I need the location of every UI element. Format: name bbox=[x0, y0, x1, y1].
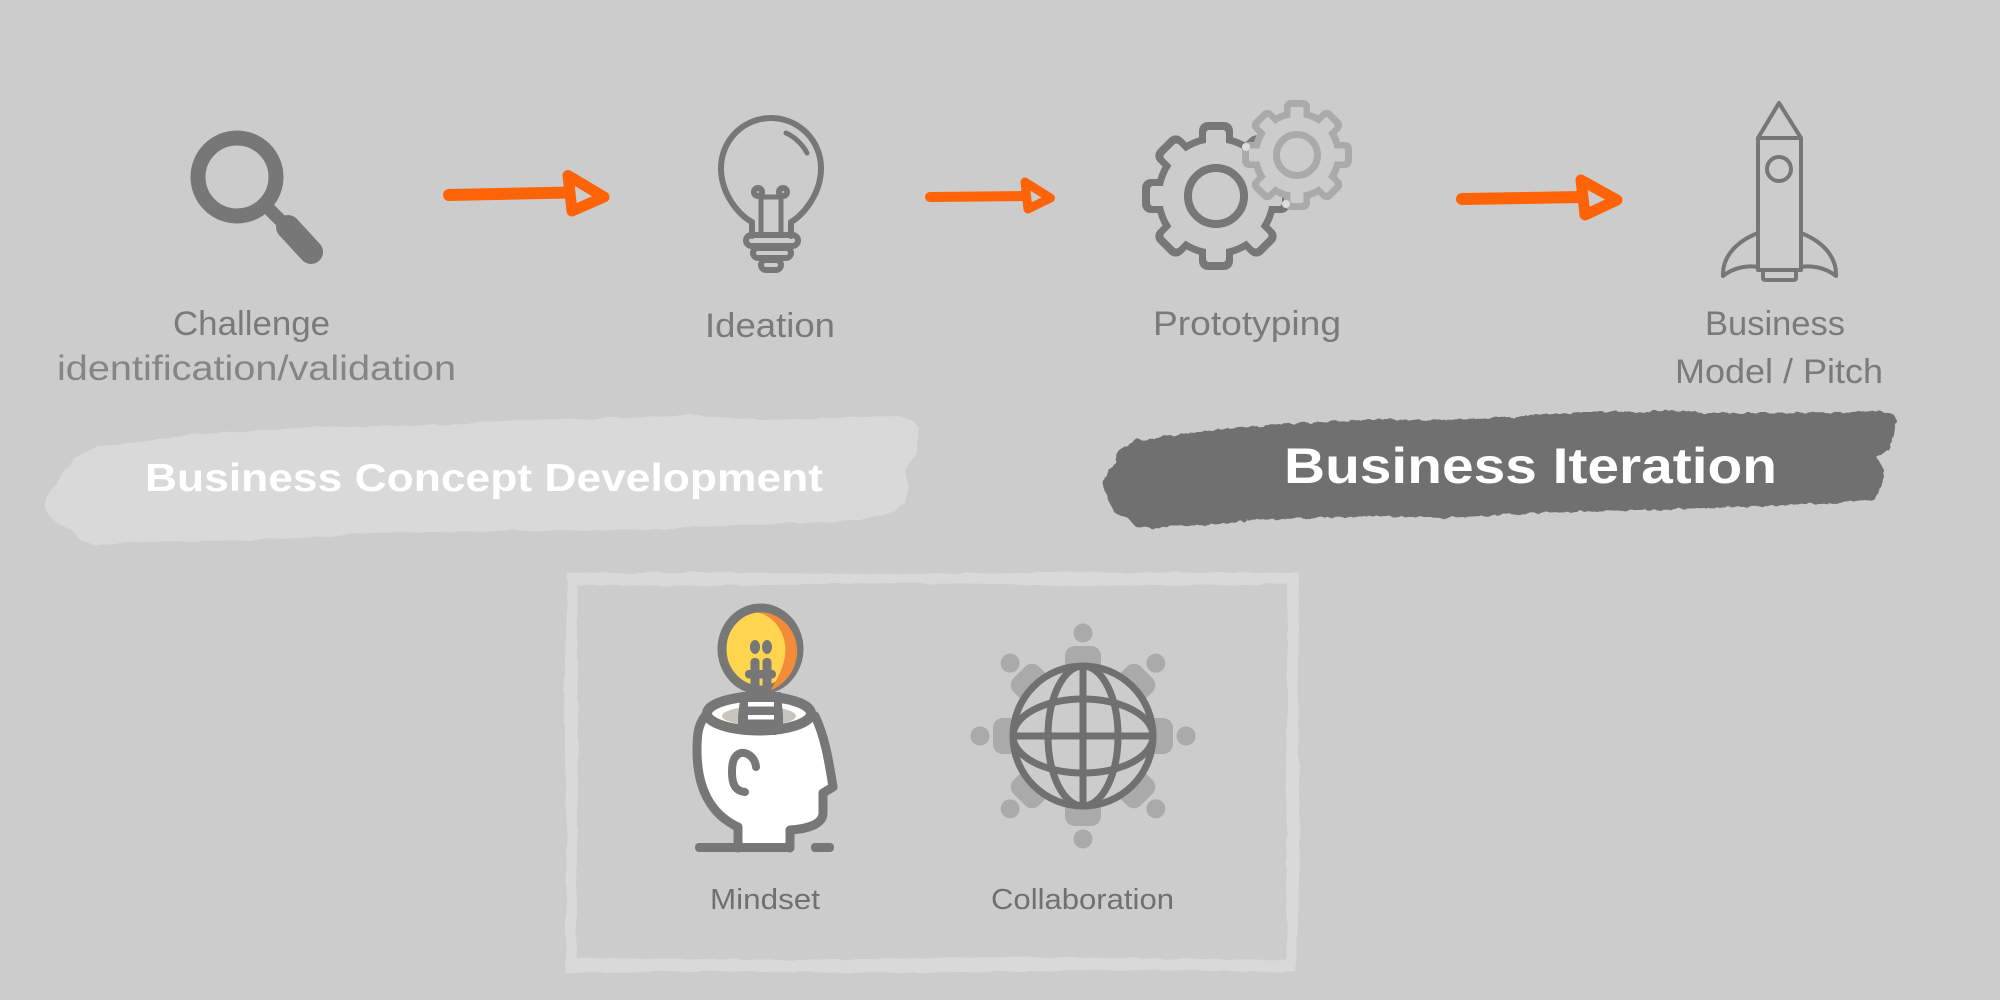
label: collaboration: Collaboration bbox=[991, 884, 1174, 916]
base line bbox=[695, 843, 792, 852]
head bbox=[697, 716, 833, 848]
people bbox=[970, 624, 1196, 848]
label: ideation: Ideation bbox=[705, 307, 835, 345]
icon: light bulb bbox=[721, 118, 821, 270]
arrow: challenge to ideation bbox=[449, 176, 604, 211]
label: business model pitch: Business bbox=[1705, 305, 1845, 343]
icon: small gear bbox=[1242, 100, 1352, 210]
label: challenge identification bbox=[57, 305, 456, 388]
arrow: prototyping to business model bbox=[1462, 180, 1617, 215]
icon: large gear bbox=[1142, 122, 1290, 270]
banner: business concept development bbox=[45, 415, 919, 545]
label: challenge identification: Challenge bbox=[173, 305, 330, 343]
ear bbox=[732, 753, 756, 792]
icon: magnifying glass bbox=[198, 138, 311, 252]
globe bbox=[1013, 666, 1153, 806]
icon: globe with people bbox=[970, 624, 1196, 848]
arrow: ideation to prototyping bbox=[930, 182, 1050, 209]
label: challenge identification: identification/validation bbox=[57, 349, 456, 388]
banner: business iteration bbox=[1103, 410, 1896, 528]
label: business model pitch bbox=[1675, 305, 1883, 391]
socket bbox=[738, 692, 783, 735]
label: business model pitch: Model / Pitch bbox=[1675, 353, 1883, 391]
banner: business concept development: Business Concept Development bbox=[145, 457, 823, 500]
icon: head with light bulb bbox=[695, 608, 834, 852]
icon: rocket bbox=[1723, 103, 1836, 280]
banner: business iteration: Business Iteration bbox=[1284, 438, 1777, 494]
bulb bbox=[722, 608, 799, 690]
small dash bbox=[811, 843, 834, 852]
label: mindset: Mindset bbox=[710, 884, 820, 916]
label: prototyping: Prototyping bbox=[1153, 305, 1341, 343]
rim bbox=[707, 696, 811, 730]
panel: mindset and collaboration frame bbox=[564, 572, 1300, 973]
filament bbox=[745, 640, 776, 696]
